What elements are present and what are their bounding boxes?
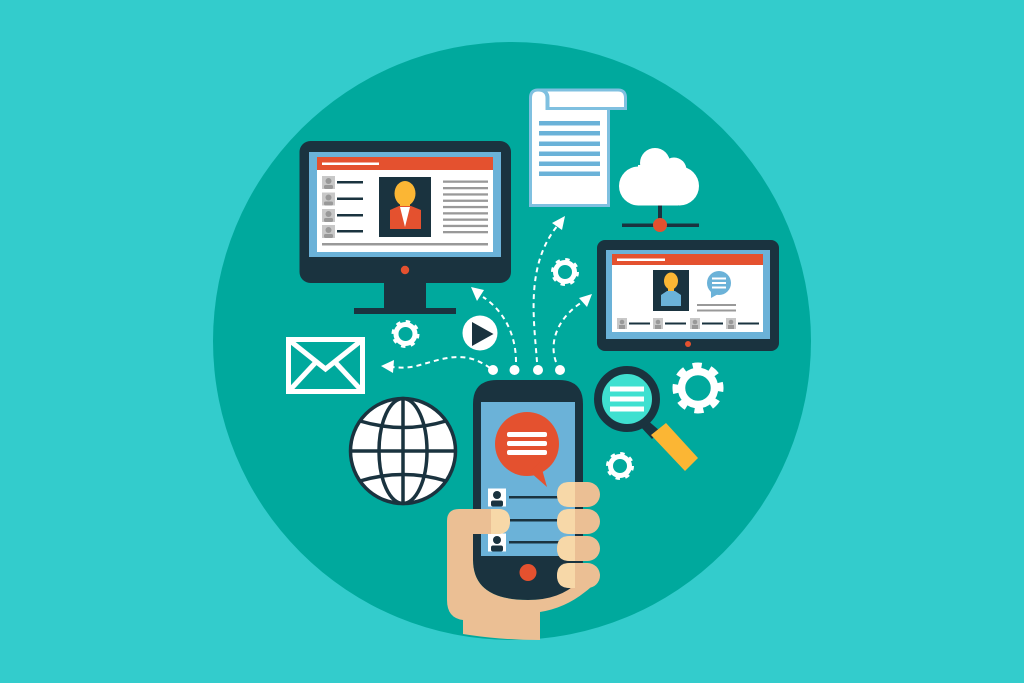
contact rows	[488, 488, 559, 552]
icon: gear left	[394, 322, 418, 346]
icon: gear top centre	[553, 260, 577, 284]
tablet portrait	[653, 270, 689, 311]
portrait	[379, 177, 431, 237]
arrow: to mail	[381, 357, 490, 373]
tablet speech bubble	[707, 271, 731, 298]
arrow: to monitor	[471, 287, 516, 362]
icon: cloud network	[619, 148, 699, 232]
icon: gear small	[608, 454, 632, 478]
chat bubble	[495, 412, 559, 487]
phone screen	[481, 402, 575, 556]
icon: magnifying glass	[598, 370, 698, 471]
central circle	[213, 42, 811, 640]
panel: phone in hand	[447, 380, 600, 640]
hand palm and thumb	[447, 509, 600, 640]
thumb nail	[491, 509, 510, 534]
phone body	[473, 380, 583, 600]
arrow: to tablet	[554, 294, 592, 362]
panel: tablet	[597, 240, 779, 351]
tablet avatars row	[617, 318, 759, 329]
fingers	[557, 482, 600, 588]
icon: globe	[350, 398, 456, 504]
connector dots	[488, 365, 565, 375]
icon: gear large	[671, 361, 725, 415]
icon: envelope	[288, 340, 362, 392]
icon: play button	[462, 316, 498, 350]
home button	[520, 564, 536, 581]
text lines	[322, 180, 488, 246]
icon: document scroll	[530, 90, 626, 206]
arrow: to document	[534, 216, 565, 362]
avatar list	[322, 176, 363, 238]
panel: desktop monitor	[300, 141, 511, 314]
